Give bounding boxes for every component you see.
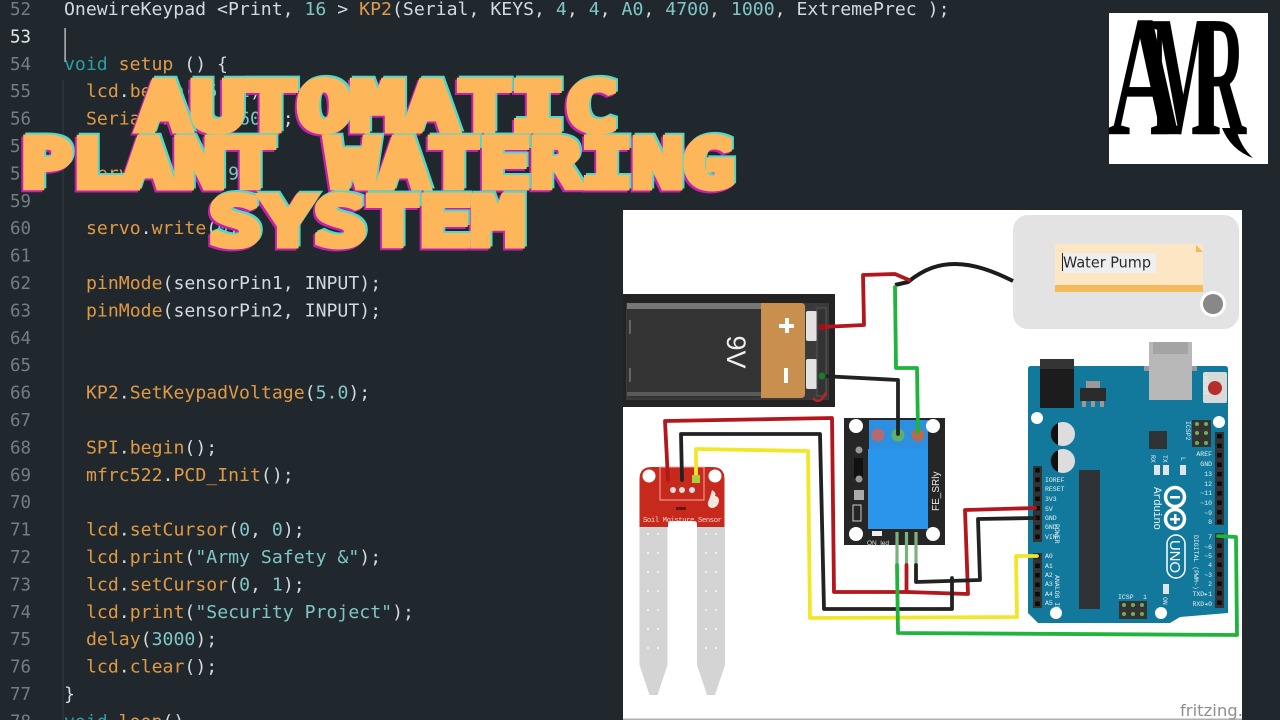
line numbers: 57 <box>10 137 31 157</box>
water pump box: Water Pump <box>1063 254 1151 272</box>
pin labels: GND <box>1045 515 1057 522</box>
wire: sensor ground <box>681 434 952 609</box>
relay labels: FE_SRly <box>931 472 942 511</box>
pin labels: TX <box>1161 455 1168 463</box>
wire: pump to relay <box>895 287 918 432</box>
pin labels: ~10 <box>1200 500 1212 507</box>
wire: sensor power <box>665 418 1035 594</box>
arduino uno: UNO <box>1166 540 1183 573</box>
code listing: delay(3000); <box>86 629 217 650</box>
pin labels: AREF <box>1196 451 1212 458</box>
9V battery <box>623 294 835 407</box>
pin labels: DIGITAL (PWM~) <box>1192 535 1199 590</box>
pin labels: RX <box>1149 455 1156 463</box>
title: shadow magenta: SYSTEM <box>207 185 522 263</box>
pin labels: IOREF <box>1045 477 1065 484</box>
code listing: lcd.clear(); <box>86 657 217 678</box>
line numbers: 76 <box>10 658 31 678</box>
pin labels: ON <box>1161 597 1168 605</box>
pin labels: ICSP <box>1118 594 1134 601</box>
pin labels: ~6 <box>1204 544 1212 551</box>
line numbers: 53 <box>10 27 31 47</box>
wire: battery positive <box>822 274 909 327</box>
code listing: KP2.SetKeypadVoltage(5.0); <box>86 383 370 404</box>
pin labels: GND <box>1045 524 1057 531</box>
code listing <box>64 0 950 720</box>
pin labels: TXD▸1 <box>1192 591 1212 598</box>
line numbers: 59 <box>10 192 31 212</box>
pin labels <box>1045 376 1212 610</box>
pin labels: 12 <box>1204 481 1212 488</box>
line numbers: 77 <box>10 685 31 705</box>
code listing: } <box>64 684 75 705</box>
title <box>19 66 736 263</box>
line numbers: 52 <box>10 0 31 20</box>
code listing: mfrc522.PCD_Init(); <box>86 465 294 486</box>
pin labels: A4 <box>1045 591 1053 598</box>
pin labels: GND <box>1200 461 1212 468</box>
code listing: pinMode(sensorPin2, INPUT); <box>86 300 381 321</box>
title: shadow magenta: PLANT WATERING <box>19 127 732 205</box>
title: main text: PLANT WATERING <box>21 125 734 203</box>
soil moisture sensor: Soil Moisture Sensor <box>643 517 722 525</box>
title: shadow cyan <box>23 66 736 259</box>
pin headers <box>1033 420 1224 619</box>
wire: relay power <box>905 565 908 592</box>
pin labels: 4 <box>1208 562 1212 569</box>
line numbers: 60 <box>10 219 31 239</box>
line numbers: 66 <box>10 384 31 404</box>
wire: relay signal <box>897 536 1237 635</box>
pin labels: 5V <box>1045 506 1053 513</box>
pin labels: A2 <box>1045 572 1053 579</box>
arduino logo <box>1166 488 1184 528</box>
title: shadow cyan: SYSTEM <box>211 181 526 259</box>
water pump box <box>1013 215 1239 329</box>
wire: battery negative <box>822 376 898 434</box>
pin labels: VIN <box>1045 534 1057 541</box>
line numbers: 61 <box>10 247 31 267</box>
title: shadow magenta <box>19 70 732 263</box>
code listing: servo.attach(9) <box>86 163 250 184</box>
title: shadow cyan: PLANT WATERING <box>23 123 736 201</box>
title: shadow magenta: AUTOMATIC <box>135 70 616 148</box>
wire end markers <box>692 324 826 483</box>
line numbers: 74 <box>10 603 31 623</box>
code listing: SPI.begin(); <box>86 437 217 458</box>
pin labels: RESET <box>1201 376 1208 396</box>
panel: circuit diagram <box>623 210 1243 720</box>
code listing: pinMode(sensorPin1, INPUT); <box>86 273 381 294</box>
code listing: void setup () { <box>64 54 228 75</box>
pin labels: ~3 <box>1204 572 1212 579</box>
line numbers: 68 <box>10 438 31 458</box>
relay module <box>844 418 945 565</box>
pin labels: POWER <box>1053 524 1060 544</box>
line numbers: 75 <box>10 630 31 650</box>
pin labels: ICSP2 <box>1184 421 1191 441</box>
line numbers: 55 <box>10 82 31 102</box>
code listing: lcd.setCursor(0, 1); <box>86 574 305 595</box>
title: shadow cyan: AUTOMATIC <box>139 66 620 144</box>
code listing: lcd.begin(16, 2); <box>86 81 272 102</box>
pin labels: A1 <box>1045 563 1053 570</box>
pin labels: ANALOG IN <box>1053 575 1060 610</box>
pin labels: A5 <box>1045 600 1053 607</box>
pin labels: L <box>1179 457 1186 461</box>
pin labels: 13 <box>1204 471 1212 478</box>
wire: relay ground <box>916 518 1035 582</box>
code listing: Serial.begin(9600); <box>86 109 294 130</box>
pin labels: A0 <box>1045 553 1053 560</box>
wire: pump cable <box>895 264 1013 285</box>
line numbers: 56 <box>10 110 31 130</box>
pin labels: 7 <box>1208 534 1212 541</box>
title: main text: AUTOMATIC <box>137 68 618 146</box>
arduino uno: Arduino <box>1150 487 1162 530</box>
code listing: servo.write(0); <box>86 218 250 239</box>
pin labels: ~9 <box>1204 510 1212 517</box>
wire: sensor signal <box>696 449 1037 618</box>
line numbers: 62 <box>10 274 31 294</box>
title: main text: SYSTEM <box>209 183 524 261</box>
pin labels: A3 <box>1045 581 1053 588</box>
pin labels: 8 <box>1208 519 1212 526</box>
code listing: lcd.print("Security Project"); <box>86 602 414 623</box>
line numbers: 71 <box>10 521 31 541</box>
line numbers: 69 <box>10 466 31 486</box>
line numbers: 63 <box>10 301 31 321</box>
pin labels: 2 <box>1208 581 1212 588</box>
pin labels: ~5 <box>1204 553 1212 560</box>
code listing: lcd.setCursor(0, 0); <box>86 520 305 541</box>
line numbers <box>10 0 31 720</box>
title: main text <box>21 68 734 261</box>
line numbers: 72 <box>10 548 31 568</box>
fritzing watermark: fritzing. <box>1180 701 1243 720</box>
pin labels: 3V3 <box>1045 496 1057 503</box>
relay module: ON_led <box>867 540 889 547</box>
line numbers: 67 <box>10 411 31 431</box>
pin labels: ~11 <box>1200 490 1212 497</box>
soil moisture sensor <box>640 467 725 695</box>
pin labels: RESET <box>1045 486 1065 493</box>
line numbers: 58 <box>10 164 31 184</box>
line numbers: 65 <box>10 356 31 376</box>
line numbers: 64 <box>10 329 31 349</box>
line numbers: 54 <box>10 55 31 75</box>
line numbers: 70 <box>10 493 31 513</box>
pin labels: RXD◂0 <box>1192 601 1212 608</box>
code listing: lcd.print("Army Safety &"); <box>86 547 381 568</box>
9V battery: 9V <box>721 335 751 369</box>
arduino uno <box>1028 342 1228 623</box>
line numbers: 73 <box>10 575 31 595</box>
pin labels: 1 <box>1143 594 1147 601</box>
